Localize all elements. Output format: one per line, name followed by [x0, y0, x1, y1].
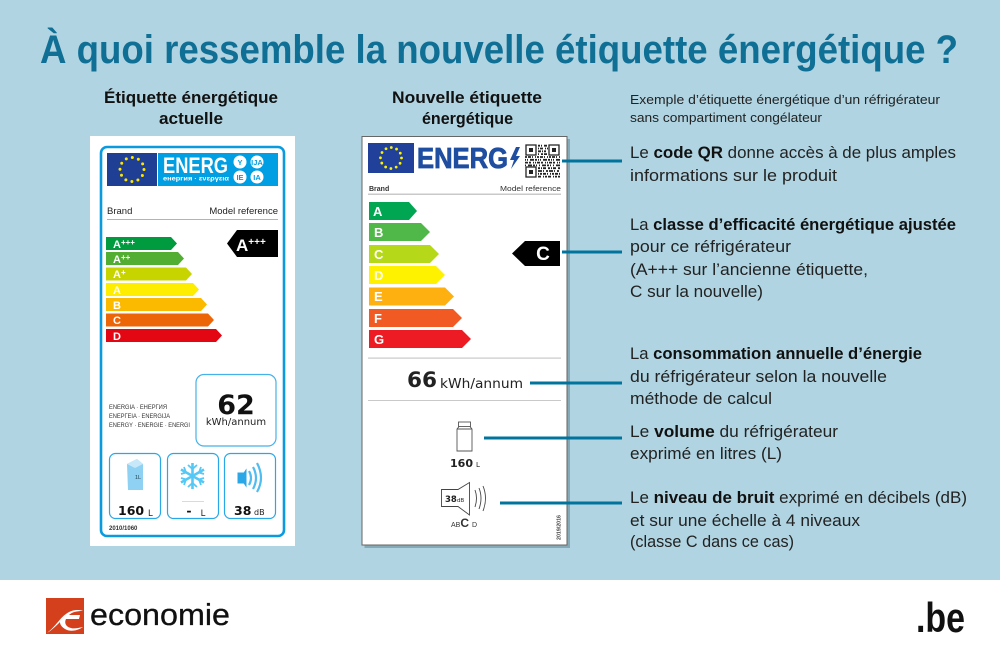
scale: A+++ to D: A	[113, 285, 121, 297]
arrow: leader to consumption	[530, 382, 622, 384]
annual consumption 66: kWh/annum	[440, 377, 523, 392]
box: annual consumption 62: kWh/annum	[206, 417, 266, 428]
scale: A+++ to D: D	[113, 331, 121, 343]
callout: efficiency class: La classe d’efficacité énergétique ajustée	[630, 216, 956, 234]
callout: QR code: Le code QR donne accès à de plus amples	[630, 144, 956, 162]
example note: sans compartiment congélateur	[630, 111, 822, 125]
callout: volume	[630, 423, 839, 463]
arrow: leader to noise	[500, 502, 622, 504]
icon: speaker noise	[442, 482, 486, 530]
heading: current label: Étiquette énergétique	[104, 88, 278, 107]
language list: ENERGY · ENERGIE · ENERGI	[109, 422, 190, 429]
brand row: Model reference	[209, 206, 278, 217]
scale: A to G: F	[374, 311, 382, 326]
language list: ΕΝΕΡΓΕΙΑ · ENERGIJA	[109, 413, 171, 420]
box: noise 38 dB	[224, 454, 276, 518]
scale: A to G: A	[373, 204, 383, 219]
callout: QR code: informations sur le produit	[630, 167, 837, 185]
arrow: leader to QR code	[562, 160, 622, 162]
icon: EU flag	[107, 153, 157, 186]
scale: A to G: C	[374, 247, 384, 262]
class arrow C: C	[536, 244, 550, 265]
panel: new energy label	[362, 136, 570, 548]
language list	[109, 404, 190, 429]
arrow: leader to class	[562, 250, 622, 254]
example note: Exemple d’étiquette énergétique d’un réfrigérateur	[630, 93, 940, 107]
annual consumption 66	[407, 368, 523, 392]
scale: A to G: G	[374, 332, 384, 347]
header: ENERG banner: IA	[253, 173, 261, 182]
class arrow A+++	[227, 230, 278, 257]
heading: new label: énergétique	[422, 109, 513, 128]
callout: efficiency class: (A+++ sur l’ancienne étiquette,	[630, 261, 868, 279]
box: volume 160 L: 160	[118, 503, 144, 518]
QR code	[525, 145, 560, 177]
icon: bottle volume: L	[476, 461, 480, 469]
box: noise 38 dB: 38	[234, 503, 251, 518]
icon: EU flag	[368, 143, 414, 173]
icon: bottle volume	[450, 422, 480, 470]
brand row: Model reference	[500, 186, 561, 193]
heading: current label: actuelle	[159, 109, 223, 128]
scale: A+++ to D: B	[113, 300, 121, 312]
box: freezer volume: -	[186, 503, 192, 518]
box: freezer volume	[168, 454, 218, 519]
class arrow A+++: A	[236, 236, 248, 255]
box: freezer volume: L	[201, 509, 206, 519]
callout: annual consumption	[630, 345, 922, 408]
box: annual consumption 62: 62	[217, 390, 255, 421]
language list: ENERGIA · ЕНЕРГИЯ	[109, 404, 167, 411]
heading: new label: Nouvelle étiquette	[392, 88, 542, 107]
class arrow A+++: +++	[248, 237, 266, 248]
scale: A to G: E	[374, 289, 383, 304]
heading: new label	[392, 88, 542, 128]
callout: volume: exprimé en litres (L)	[630, 445, 782, 463]
logo: economie	[46, 597, 230, 634]
scale: A+++ to D: A	[113, 269, 121, 281]
callout: noise level	[630, 489, 967, 551]
header: ENERG banner: енергия · ενεργεια	[163, 176, 229, 182]
header: ENERG banner: ENERG	[163, 153, 228, 178]
icon: speaker noise: ABC D	[451, 516, 477, 530]
scale: A to G: D	[374, 268, 383, 283]
callout: annual consumption: méthode de calcul	[630, 390, 772, 408]
class arrow C	[512, 241, 560, 266]
brand row	[107, 206, 278, 220]
box: volume 160 L	[110, 454, 160, 519]
callout: volume: Le volume du réfrigérateur	[630, 423, 839, 441]
callout: QR code	[630, 144, 956, 185]
arrow: leader to volume	[484, 436, 622, 440]
scale: A+++ to D: +	[121, 268, 126, 277]
callout: efficiency class	[630, 216, 956, 301]
box: annual consumption 62	[196, 374, 276, 446]
icon: speaker noise: 38dB	[445, 495, 464, 505]
logo: .be: .be	[916, 594, 965, 641]
box: volume 160 L: 1L	[135, 475, 141, 481]
scale: A to G: B	[374, 225, 383, 240]
example note	[630, 93, 940, 125]
callout: annual consumption: La consommation annuelle d’énergie	[630, 345, 922, 363]
heading: current label	[104, 88, 278, 128]
header: ENERG banner: IJA	[251, 158, 263, 167]
annual consumption 66: 66	[407, 368, 437, 392]
regulation number: 2010/1060	[109, 526, 138, 532]
logo: economie: economie	[90, 597, 230, 632]
box: volume 160 L: L	[148, 509, 153, 519]
brand row: Brand	[107, 206, 132, 217]
callout: annual consumption: du réfrigérateur selon la nouvelle	[630, 368, 887, 386]
scale: A+++ to D: ++	[121, 253, 131, 262]
callout: noise level: Le niveau de bruit exprimé en décibels (dB)	[630, 489, 967, 507]
scale: A+++ to D	[106, 237, 222, 343]
brand row: Brand	[369, 186, 389, 193]
header: ENERG banner: Y	[237, 158, 243, 167]
callout: noise level: (classe C dans ce cas)	[630, 533, 794, 551]
callout: efficiency class: pour ce réfrigérateur	[630, 238, 792, 256]
callout: efficiency class: C sur la nouvelle)	[630, 283, 763, 301]
scale: A+++ to D: A	[113, 239, 121, 251]
header: ENERG banner: IE	[236, 173, 244, 182]
icon: bottle volume: 160	[450, 458, 473, 470]
brand row	[368, 186, 561, 195]
box: noise 38 dB: dB	[254, 508, 265, 517]
panel: current energy label	[90, 136, 295, 546]
scale: A+++ to D: +++	[121, 238, 135, 247]
regulation number: 2019/2016	[556, 515, 562, 540]
scale: A to G	[369, 202, 471, 348]
callout: noise level: et sur une échelle à 4 niveaux	[630, 512, 861, 530]
scale: A+++ to D: A	[113, 254, 121, 266]
scale: A+++ to D: C	[113, 315, 121, 327]
header: ENERG banner	[158, 153, 278, 186]
header: ENERG logo: ENERG	[417, 143, 508, 175]
